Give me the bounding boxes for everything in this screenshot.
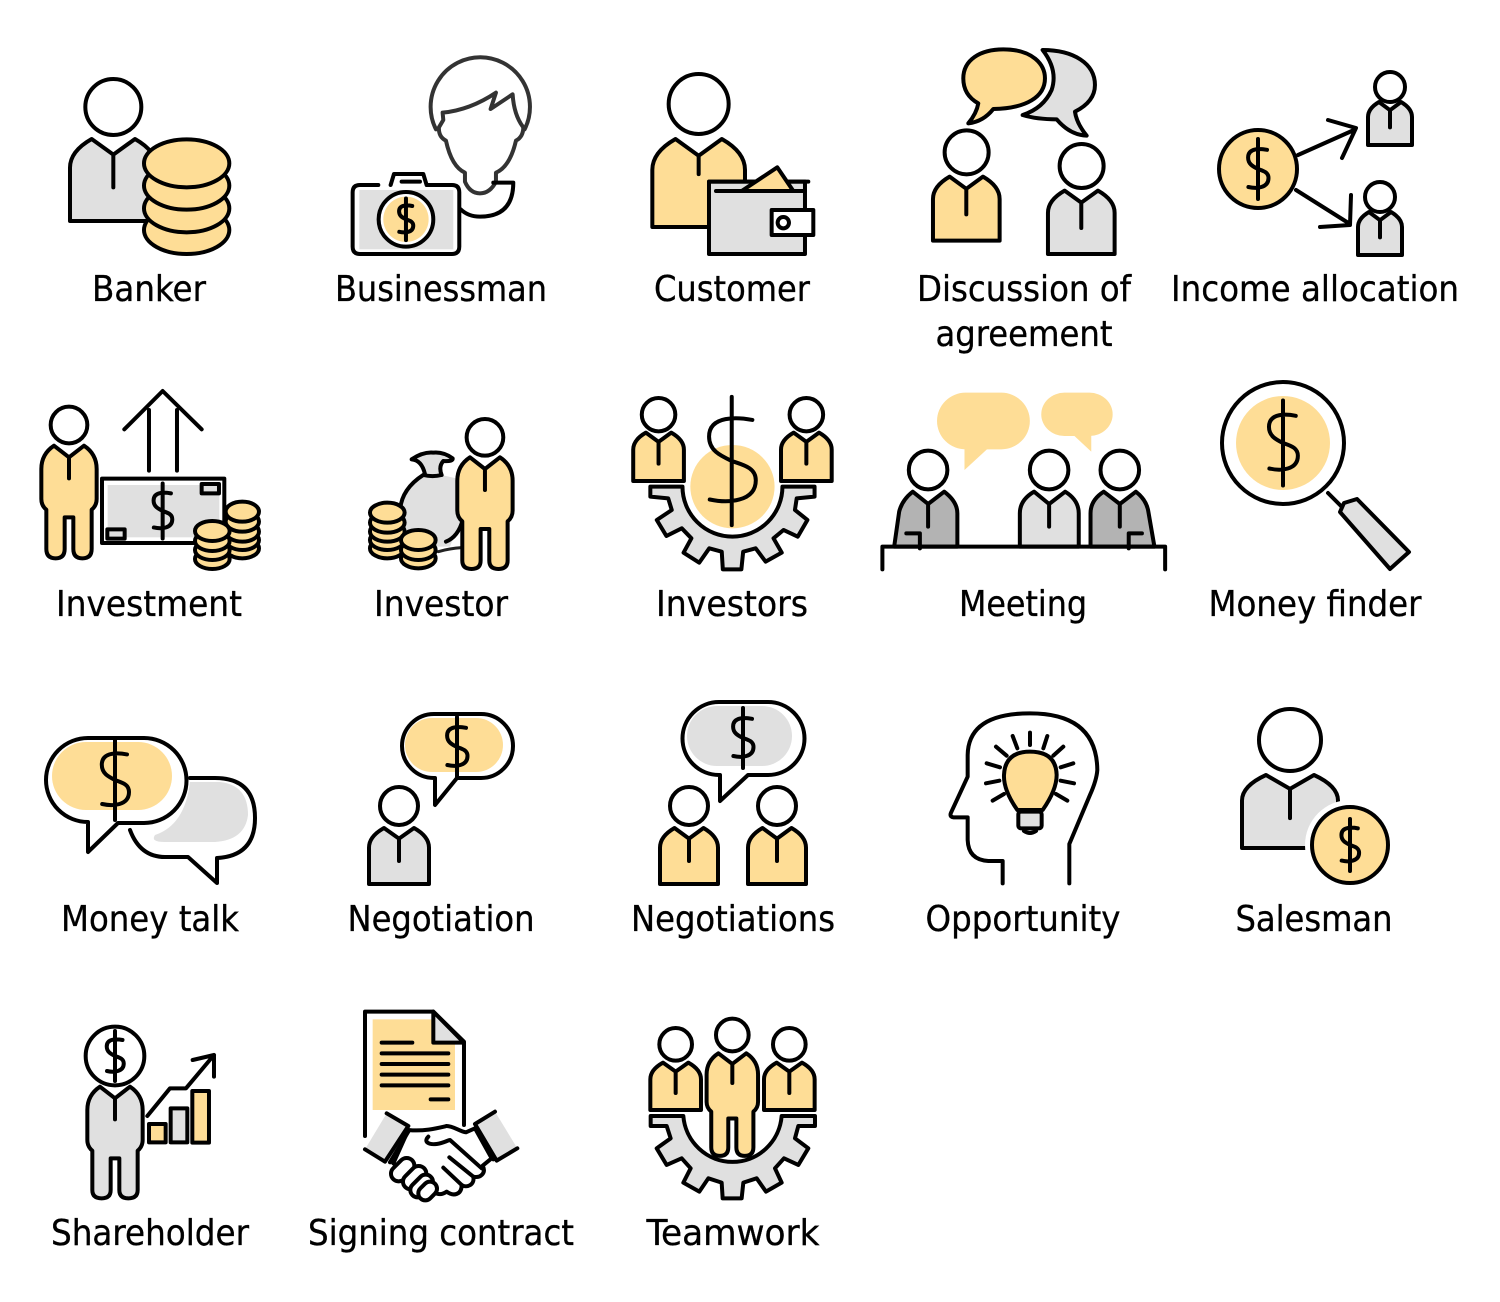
icon: three people and gear <box>650 1019 815 1198</box>
icon: two people with speech bubbles <box>933 49 1115 254</box>
label: Shareholder <box>51 1213 250 1254</box>
icon: two people with dollar bubble <box>660 702 806 884</box>
panel: Negotiation <box>348 714 534 940</box>
panel: Businessman <box>335 57 547 310</box>
panel: Investment <box>41 391 259 625</box>
label line two: agreement <box>936 314 1112 355</box>
icon: customer with wallet <box>652 74 813 254</box>
panel: Investor <box>370 419 513 625</box>
panel: Investors <box>633 397 832 625</box>
icon: two dollar speech bubbles <box>46 738 255 883</box>
label: Money talk <box>61 899 239 940</box>
label: Opportunity <box>926 899 1120 940</box>
label: Discussion of <box>917 269 1133 310</box>
icon: businessman with camera <box>353 57 530 254</box>
label: Meeting <box>959 584 1087 625</box>
icon: person with money bag and coins <box>370 419 513 569</box>
label: Money finder <box>1208 584 1422 625</box>
icon: contract document and handshake <box>365 1012 517 1203</box>
panel: Money talk <box>46 738 255 940</box>
label: Investor <box>374 584 509 625</box>
panel: Banker <box>70 79 229 310</box>
panel: Meeting <box>882 393 1165 625</box>
panel: Money finder <box>1208 382 1422 625</box>
icon: salesman with coin <box>1242 709 1395 890</box>
panel: Signing contract <box>308 1012 574 1254</box>
panel: Teamwork <box>645 1019 820 1254</box>
icon: person with dollar bubble <box>369 714 513 884</box>
icon: three people at table with speech bubbles <box>882 393 1165 569</box>
icon: head with light bulb <box>951 713 1097 883</box>
label: Customer <box>654 269 811 310</box>
icon: two people, gear and dollar <box>633 397 832 569</box>
label: Negotiations <box>631 899 835 940</box>
icon: coin with arrows to two people <box>1219 72 1412 255</box>
panel: Income allocation <box>1171 72 1459 310</box>
label: Negotiation <box>348 899 534 940</box>
label: Signing contract <box>308 1213 574 1254</box>
label: Businessman <box>335 269 547 310</box>
label: Investors <box>656 584 808 625</box>
label: Salesman <box>1236 899 1392 940</box>
label: Banker <box>92 269 207 310</box>
panel: Customer <box>652 74 813 310</box>
panel: Opportunity <box>926 713 1120 940</box>
label: Teamwork <box>645 1213 820 1254</box>
label: Investment <box>56 584 242 625</box>
panel: Discussion of agreement <box>917 49 1133 355</box>
icon: magnifier with dollar <box>1222 382 1409 569</box>
panel: Shareholder <box>51 1027 250 1254</box>
icon: banker with coins <box>70 79 229 254</box>
label: Income allocation <box>1171 269 1459 310</box>
icon: person with dollar head and growth chart <box>86 1027 214 1198</box>
panel: Salesman <box>1236 709 1395 940</box>
panel: Negotiations <box>631 702 835 940</box>
icon: person, banknote, arrow and coins <box>41 391 259 569</box>
